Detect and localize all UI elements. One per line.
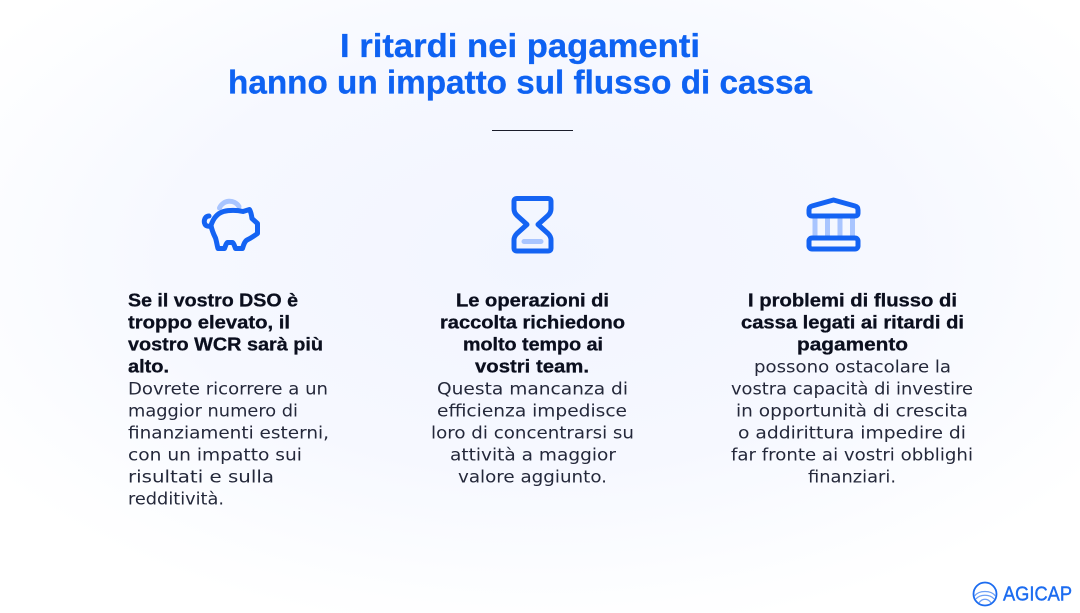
text block: column 3: possono ostacolare la (754, 358, 951, 378)
text block: column 1 (128, 290, 329, 510)
text block: column 1: Dovrete ricorrere a un (128, 380, 328, 400)
text block: column 3: cassa legati ai ritardi di (741, 312, 964, 332)
text block: column 2: attività a maggior (450, 446, 616, 466)
text block: column 3: vostra capacità di investire (731, 380, 973, 400)
text block: column 3 (731, 290, 973, 488)
text block: column 2: Questa mancanza di (437, 380, 628, 400)
text block: column 2: vostri team. (475, 356, 589, 376)
text block: column 1: alto. (128, 356, 169, 376)
text block: column 3: far fronte ai vostri obblighi (731, 446, 973, 466)
title (228, 27, 813, 100)
text block: column 1: risultati e sulla (128, 468, 274, 488)
text block: column 2: efficienza impedisce (437, 402, 627, 422)
text block: column 2: loro di concentrarsi su (431, 424, 634, 444)
text block: column 1: troppo elevato, il (128, 312, 290, 332)
text block: column 1: Se il vostro DSO è (128, 290, 298, 310)
text block: column 3: o addirittura impedire di (738, 424, 966, 444)
text block: column 1: vostro WCR sarà più (128, 334, 323, 354)
text block: column 1: redditività. (128, 490, 224, 510)
text block: column 2: molto tempo ai (463, 334, 603, 354)
logo: AGICAP: AGICAP (1003, 584, 1072, 606)
icon: piggy bank (204, 201, 258, 248)
icon: bank building (809, 200, 858, 249)
text block: column 2 (431, 290, 634, 488)
title: I ritardi nei pagamenti (340, 27, 700, 64)
text block: column 2: Le operazioni di (456, 290, 609, 310)
title: hanno un impatto sul flusso di cassa (228, 64, 813, 100)
text block: column 1: maggior numero di (128, 402, 298, 422)
text block: column 3: pagamento (797, 334, 908, 354)
text block: column 1: con un impatto sui (128, 446, 302, 466)
text block: column 2: raccolta richiedono (440, 312, 625, 332)
icon: hourglass (514, 198, 551, 251)
text block: column 2: valore aggiunto. (458, 468, 607, 488)
text block: column 3: in opportunità di crescita (736, 402, 968, 422)
text block: column 1: finanziamenti esterni, (128, 424, 329, 444)
text block: column 3: I problemi di flusso di (748, 290, 957, 310)
text block: column 3: finanziari. (808, 468, 896, 488)
logo: AGICAP (974, 582, 1072, 606)
